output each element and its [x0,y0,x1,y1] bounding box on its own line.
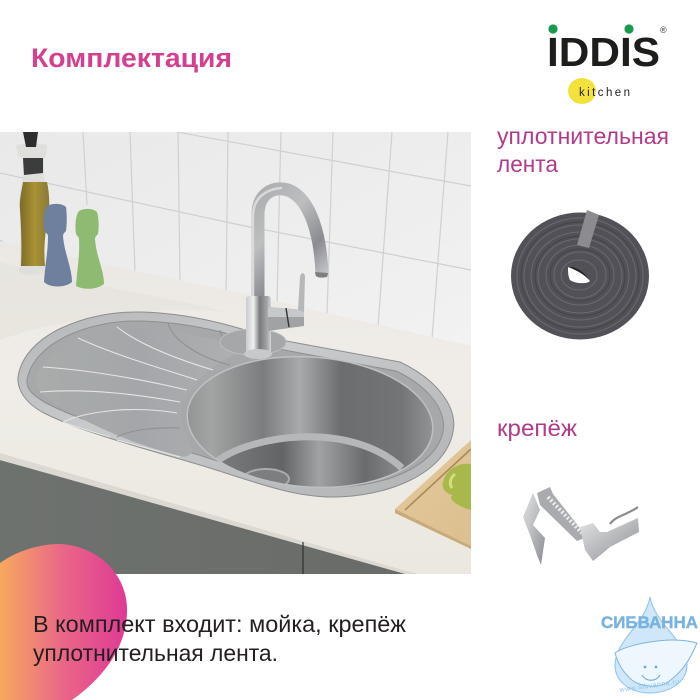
title: Комплектация [31,43,232,73]
watermark: Sibvanna: www.sibvanna.ru [618,679,680,694]
fastener clamp [523,487,639,565]
logo: IDDIS kitchen: IDDIS [547,29,660,75]
logo: IDDIS kitchen: ® [660,25,667,35]
sink rim [18,312,454,497]
drainboard [79,417,192,457]
gradient blob [0,544,127,700]
label: sealing tape [497,123,669,177]
sink deck [27,321,444,487]
countertop [0,242,471,574]
faucet [244,188,328,359]
logo: IDDIS kitchen [547,24,667,104]
blue pepper mill [43,204,72,286]
sink bowl [188,358,432,486]
description text: В комплект входит: мойка, крепёж [33,611,407,637]
faucet base plate [220,329,286,355]
description text [33,611,407,666]
tape roll [511,210,649,340]
label: sealing tape: уплотнительная [497,123,669,149]
cabinet front [0,453,417,574]
watermark: Sibvanna: СИБВАННА [601,613,698,632]
oil bottle [16,132,49,275]
label: fastener: крепёж [497,415,578,441]
counter shadow [0,262,240,340]
photo: kitchen sink [0,132,471,574]
tiled wall [0,132,471,352]
bowl curved highlight [216,437,402,468]
cutting board [395,440,471,549]
bowl floor [222,440,399,486]
drainboard grooves [40,323,243,457]
drain [246,468,290,484]
pepper [443,464,471,510]
logo: IDDIS kitchen: kitchen [579,87,630,99]
watermark: Sibvanna [601,597,698,694]
label: sealing tape: лента [497,151,558,177]
green pepper mill [75,209,104,289]
description text: уплотнительная лента. [33,640,278,666]
